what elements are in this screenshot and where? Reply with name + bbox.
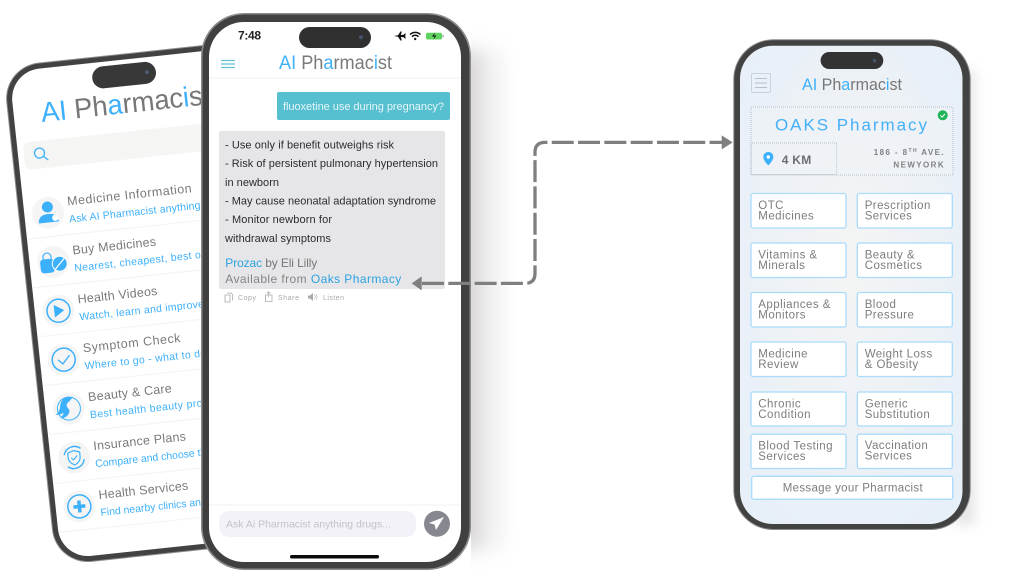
answer bubble: - May cause neonatal adaptation syndrome (225, 196, 436, 208)
service button: vitamins and minerals: Minerals (758, 260, 805, 272)
answer bubble (219, 131, 445, 289)
service button: blood pressure: Pressure (865, 310, 914, 322)
service button: medicine review: Medicine (758, 348, 808, 360)
message your pharmacist button: Message your Pharmacist (783, 482, 923, 494)
answer bubble: Prozac by Eli Lilly (225, 256, 317, 270)
menu item: medicine information (30, 181, 201, 231)
service button: OTC medicines: OTC (758, 200, 784, 212)
answer actions: Listen (323, 295, 344, 302)
menu item: beauty and care: Best health beauty products (89, 394, 230, 421)
service button: blood testing services: Blood Testing (758, 441, 833, 453)
answer bubble: withdrawal symptoms (224, 233, 332, 245)
service button: prescription services: Prescription (865, 200, 931, 212)
service button: prescription services (857, 194, 952, 228)
left phone logo: AI Pharmacist (39, 79, 212, 128)
service button: weight loss and obesity: Weight Loss (865, 348, 933, 360)
menu item: medicine information: Medicine Information (66, 181, 192, 209)
answer bubble: - Monitor newborn for (225, 214, 332, 226)
service button: prescription services: Services (865, 210, 912, 222)
service button: medicine review: Review (758, 359, 799, 371)
center logo: AI Pharmacist (279, 53, 393, 74)
hamburger icon (221, 60, 235, 68)
menu item: buy medicines (36, 227, 231, 279)
pharmacy card (751, 107, 953, 175)
message your pharmacist button (752, 476, 953, 499)
answer actions (225, 292, 344, 302)
right phone shadow (955, 70, 975, 525)
service button: weight loss and obesity: & Obesity (865, 359, 919, 371)
menu item: medicine information: Ask AI Pharmacist anything (69, 200, 201, 226)
status bar (238, 27, 444, 48)
send button (424, 511, 450, 537)
pharmacy card: OAKS Pharmacy (775, 116, 928, 135)
service button: chronic condition (751, 392, 846, 426)
pharmacy card: 186 - 8 (874, 148, 909, 157)
answer bubble: - Risk of persistent pulmonary hypertension (225, 158, 438, 170)
service button: generic substitution: Generic (865, 398, 908, 410)
service button: blood pressure (857, 292, 952, 327)
dashed double-headed arrow (412, 135, 733, 290)
service button: vitamins and minerals (751, 243, 846, 278)
menu item: buy medicines: Buy Medicines (72, 235, 157, 257)
service button: appliances and monitors: Monitors (758, 310, 806, 322)
menu item: symptom check (46, 328, 207, 377)
menu item: buy medicines: Nearest, cheapest, best options (74, 246, 231, 274)
user question bubble (277, 92, 450, 120)
service button: appliances and monitors (751, 292, 846, 327)
user question bubble: fluoxetine use during pregnancy? (283, 101, 444, 113)
pharmacy card: AVE. (918, 148, 945, 157)
right phone: pharmacy home (733, 39, 971, 530)
right phone logo: AI Pharmacist (802, 75, 902, 94)
home indicator (290, 555, 379, 558)
service button: medicine review (751, 342, 846, 376)
answer bubble: in newborn (225, 177, 279, 189)
menu item: symptom check: Where to go - what to do (84, 347, 207, 372)
service button: blood testing services: Services (758, 451, 806, 463)
menu item: insurance plans: Compare and choose the best (95, 443, 235, 470)
service button: beauty and cosmetics: Beauty & (865, 250, 915, 262)
menu item: health videos: Watch, learn and improve (79, 298, 205, 323)
menu item: health videos (41, 279, 205, 328)
menu item: symptom check: Symptom Check (82, 331, 182, 355)
pharmacy card: TH (909, 148, 918, 154)
menu item: health services (62, 474, 231, 524)
service button: beauty and cosmetics: Cosmetics (865, 260, 922, 272)
service button: OTC medicines (751, 194, 846, 228)
left phone notch (91, 61, 157, 89)
service button: generic substitution (857, 392, 952, 426)
answer bubble: - Use only if benefit outweighs risk (225, 140, 394, 152)
service button: chronic condition: Chronic (758, 398, 801, 410)
service button: appliances and monitors: Appliances & (758, 299, 831, 311)
left phone: app menu (2, 40, 299, 566)
service button: vaccination services: Vaccination (865, 440, 928, 452)
menu icon (752, 74, 770, 92)
menu item: insurance plans (57, 424, 235, 475)
menu item: health services: Find nearby clinics and care (100, 493, 231, 519)
center phone: chat (201, 13, 471, 570)
answer bubble: Available from Oaks Pharmacy (225, 272, 401, 286)
answer actions: Share (278, 295, 299, 302)
pharmacy card: 4 KM (782, 153, 811, 167)
service button: blood pressure: Blood (865, 299, 896, 311)
status bar: 7:48 (238, 28, 261, 42)
service button: blood testing services (751, 434, 846, 468)
search bar (23, 118, 256, 170)
service button: vitamins and minerals: Vitamins & (758, 250, 818, 262)
service button: OTC medicines: Medicines (758, 210, 814, 222)
chat input (219, 511, 416, 537)
answer actions: Copy (238, 295, 256, 302)
pharmacy card: NEWYORK (893, 160, 945, 169)
service button: beauty and cosmetics (857, 243, 952, 278)
service button: vaccination services: Services (865, 451, 912, 463)
service button: generic substitution: Substitution (865, 409, 930, 421)
menu item: beauty and care (51, 375, 230, 426)
menu item: health videos: Health Videos (77, 284, 158, 306)
service button: weight loss and obesity (857, 342, 952, 376)
chat input: Ask Ai Pharmacist anything drugs... (226, 518, 391, 530)
service button: chronic condition: Condition (758, 409, 811, 421)
service button: vaccination services (857, 434, 952, 468)
menu item: beauty and care: Beauty & Care (87, 381, 172, 404)
menu item: insurance plans: Insurance Plans (93, 429, 187, 453)
right phone notch (821, 52, 883, 69)
center phone shadow (471, 50, 515, 550)
menu item: health services: Health Services (98, 479, 189, 502)
